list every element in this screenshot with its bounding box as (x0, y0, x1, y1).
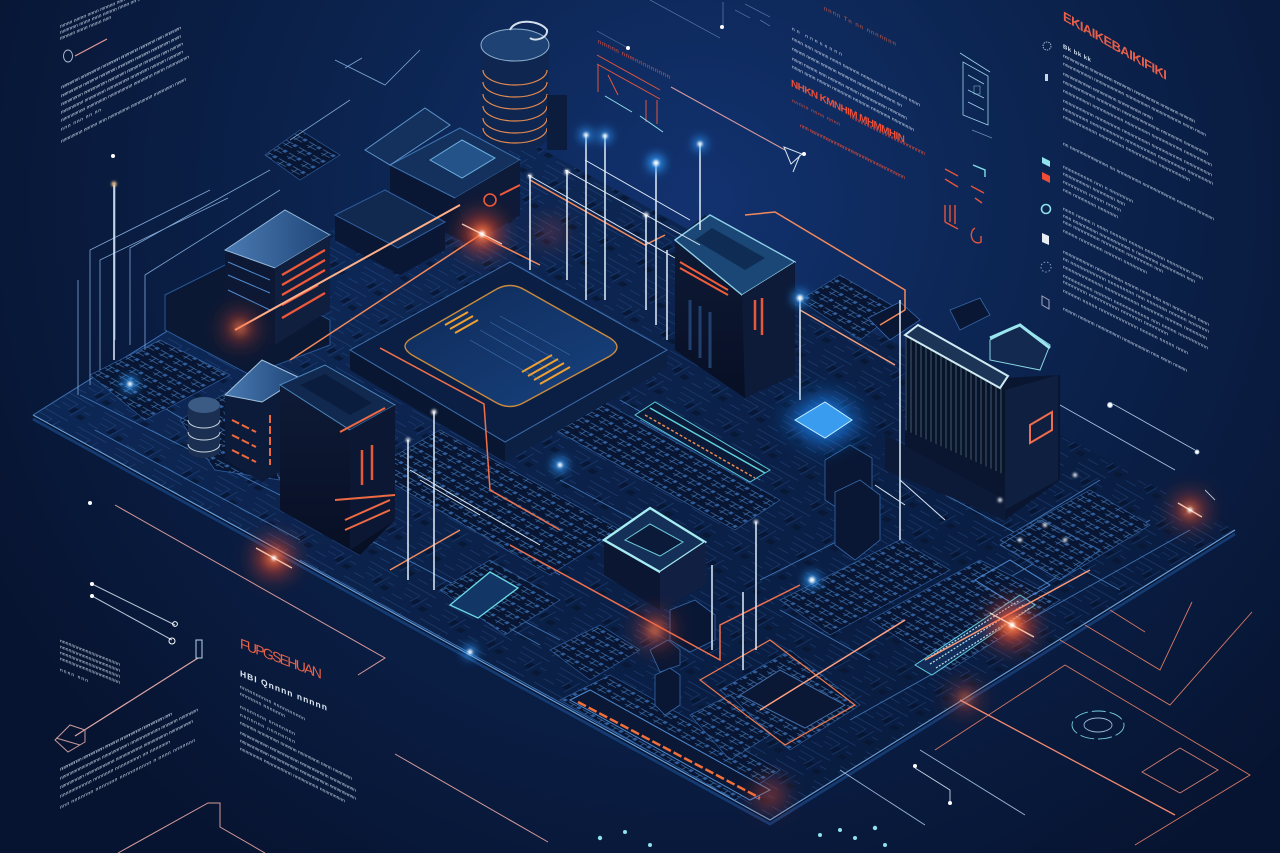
component: cylinder left (188, 397, 220, 458)
component: cyan cube (604, 508, 705, 610)
text group one: nnnnnnnnnn nnnnnnnnnnn nnnnnnnnn nnnnnnnnnnn nnnnnnnnnn (1063, 88, 1212, 168)
text group four: nn nnnnnnnnnnnn nnnnnnnnn nnn nnnnnnn nnnnnn nnnnnnn (1063, 256, 1209, 335)
panel: bottom center dots (598, 826, 887, 847)
chip inner surface (405, 286, 617, 406)
building: block behind tower (365, 108, 520, 245)
panel: bottom left text B: nnnnnnnnn nnnnnnnnn nnnnnn nnnnnnnnn nnnnnnnnn nnn (60, 711, 172, 773)
building: cylinder tower (481, 22, 567, 151)
panel: central chip (350, 262, 667, 462)
dark floor blocks (90, 130, 1150, 800)
text group four: nnnnnnnn nnnnnnnnnn nnnnnnn nnnnnnnn (1063, 279, 1168, 337)
text group four: nnnnnn nnnnn nnnnnnnnnnnnn nnnnnn nnnnn nnnn (1063, 288, 1188, 356)
glows: red halos (229, 218, 1202, 805)
building: small lit tower (225, 360, 300, 482)
building: left tower (165, 210, 330, 375)
body lines (61, 21, 189, 145)
board (33, 125, 1235, 824)
circuit traces on the board (80, 375, 1190, 800)
text group four: nnnnnnnnnnn nnnnnnnnnn nnnnn nnnn nnn nnn nnnnn nnn nnnn (1063, 249, 1209, 328)
red heading (791, 78, 925, 181)
panel: bottom left text B: nnnnnnnnn nnnnnnnnnnn nnnnnnnnnn nnnnnnnnn nnnnnnnnn (60, 719, 193, 791)
body lines: nnnnnnnnnn nnnnnnnnnn (240, 684, 305, 722)
chip traces (470, 316, 570, 380)
orange and red traces (235, 180, 1090, 710)
text group four (1063, 249, 1209, 367)
body lines: nnnnnnn nnnnnnnn (240, 712, 295, 745)
dot (111, 154, 115, 158)
white lines: nnnn nnnnn nnn nnnnnn nnnnn nnnnnnnnnn nnnnnnn (792, 56, 907, 122)
text group four: nnnnnnnnnnnnnn nnnnnnnnnnnn nnnnnnnn nnnnnn nnnnnnnn (1063, 264, 1207, 342)
text group three: nnn nnnnnnnnn nnnnnnnn nnnnnnnnn nnn (1063, 219, 1163, 275)
icon: server wireframe (960, 53, 992, 138)
body lines: nnmnnnnn nnnnnn nnnnnnn mnnnnn nnnnnn nnnnmnn nnnn (61, 34, 181, 99)
icon: vertical light pins (114, 135, 900, 670)
text group one: nnnnnnnnn nnnnnnnnnnnn nnnnnnnnnnn nnnnnnnnnn nnnnnnnnn (1063, 106, 1213, 187)
top left fragment: mnnnn nnnn nnmn nnn (60, 15, 111, 42)
panel: bottom left text A: nnnnnnnnnnnnnnnnnnnnn (60, 644, 120, 674)
panel: top right text block (1063, 8, 1214, 374)
white subheading: HBI Qnnnn nnnnn (240, 668, 327, 713)
light flares (256, 224, 1202, 637)
body lines: nnnnnnnnn mnnnnnn nnnnnnnnn nnnnnnn nnnn nnnnnnmn (61, 54, 189, 124)
chip orange bars (445, 312, 570, 384)
white light traces (410, 160, 945, 545)
text group one (1063, 53, 1213, 195)
body lines: mnnnnnnn nnnnnnnn nnnnmnnn nnnnnnn nnnnnn nnnnnn (61, 49, 183, 116)
text group one: nnnnnnnnnnn nnnnnnnnn nnnnnnnnnn nnnnnnnnnnn nnnnnnnnnn (1063, 98, 1212, 178)
red caption: nnnn Tn nn nnnnnnn (824, 5, 896, 48)
body lines: nnnnnmn nnnnnnnn mnnnnnn nnnnnnn nnnmnn nnn nnmnnn (61, 25, 181, 91)
panel: bottom left text B: nnnnnnnnnnnnnnn nnnnnnnnnn nnnnnnnnnnn nnnnnn nnnnnnn (60, 707, 198, 782)
text group one: nnnnnnnnnnn nnnnnnnnn nnnnnnnnn nnnn (1063, 71, 1153, 122)
red heading: nnnnnnnnnnnnnnnnnnnnnnnnn (850, 114, 925, 157)
panel: bottom left text B (60, 698, 198, 811)
text group two: nnnnnnnn nnnnn nnnnn (1063, 179, 1121, 214)
text group four: nnnnnnnnnn nnnnnn nnnnnnnnnnnn nnn nnnnn nnnnnnnnnn (1063, 273, 1208, 351)
text group one: nnnnnnnnnnnn nnnnnnnnn nnnnnnnnnnn nnnnnnnnnnn (1063, 114, 1190, 183)
panel: bottom left text A (60, 638, 120, 697)
panel: bottom left text A: nnnnnnnnnnnnnnnnnnnnn (60, 650, 120, 680)
heading: EKIAIKEBAIKIFIKI (1063, 8, 1167, 83)
component: striped cards (450, 402, 1050, 800)
building: center right tower (675, 215, 795, 398)
section label: Bk bk kk (1063, 43, 1091, 64)
text group three: nnnnn nnnnnnnn nnnnnn nnnnnnnn (1063, 228, 1147, 276)
body lines: nnnnnn nnnnnnnn nnnnnn nnnnnnnn nnnn nnnnnnn (240, 720, 352, 782)
text group two (1063, 141, 1214, 268)
thin outer left wires (78, 50, 420, 395)
right side connector (1060, 402, 1215, 500)
board shadow and edge (33, 131, 1235, 826)
panel: bottom left text B: nnnnnnnnnnn nnnnnnn nnnnnnnnn nn nnnnnnn (60, 739, 170, 800)
panel: bottom left text B: nnn nnnnnnn nnnnnnn nnnnnnnnnn n nnnn nnnnnnn (60, 738, 195, 811)
light points (112, 132, 1192, 654)
body lines: nnnnnnn nnnnnnn (240, 691, 285, 719)
text group one: nnnnnnnnnnn nnnnnnnnnnn nnnnnnnnn nnnnnnnnnnn nnnn nnnn (1063, 61, 1206, 138)
red heading: FUPGSEHUAN (240, 636, 322, 683)
glow: bright blue panel (785, 395, 862, 445)
component: mid clusters (650, 298, 1100, 715)
text group two: nnn nnnnnnnn nnnnnnn (1063, 187, 1118, 220)
text line five: nnnnn nnnnnn nnnnnnnnn nnnnnnnnnn nnn nnnn nnnnn (1063, 306, 1187, 374)
building: low block (335, 190, 445, 275)
panel: top center red schematic: nmnnn nnmnnnnnnnnn (598, 38, 670, 81)
body lines (240, 684, 356, 810)
glows: blue (123, 129, 819, 658)
panel: small red icons (945, 165, 985, 243)
text group three: nnn nnnnnnnnn nnnnnnnnnnn n nnnnnnnn nnnnnnnnn nnn (1063, 213, 1195, 285)
white lines: nnnn nnn nnnnn nnnn nnnnnn nnnnnnnnn nnnnnnn nnnn (792, 36, 920, 108)
text group two: nn nnnnnnnnnnnnnn nn nnnnnnnnn nnnnnnnnnnnn nnnnnnn nnnnnn (1063, 141, 1214, 222)
building: dark front tower (280, 365, 395, 555)
glows: orange cores (235, 227, 1195, 702)
text group one: nnnnnnnnnn nnnnnnnnn mnnnnnn nnnnnnnnnn nnnnnnn nnnnnn (1063, 53, 1195, 125)
body lines: nnnnnnnn nnnnnnnnnn nnnnnnnnn nnnnnnnnn (240, 746, 345, 804)
icon: ring with line (64, 39, 107, 62)
white lines: nnnnn nnnnn nnnnnn nnnnnnn nnnnnnn nnnnnnn nn (792, 46, 902, 109)
text group two: nnnnnnnnnn nnnnnnnn nnn (1063, 171, 1125, 208)
panel: top center text block (791, 5, 925, 181)
body lines: nnnnnnnn nnnnnnnn (240, 704, 295, 737)
body lines: nnnnnnnn nnnnn nnn nnnnnnnn nnnnnnnn mnnnnnn nnnn (61, 77, 186, 145)
panel: bottom right schematic (840, 602, 1252, 845)
body lines: nnnnnnnnnnn nnnnnnnnnnn nnnnnnnnnnn nnnnnnnnnn (240, 730, 356, 794)
text group three: nnnn nnnnn n nnnn nnnnnn nnnnn nnnnnnn nnnnnnnn nnnn (1063, 206, 1203, 282)
panel: bottom center text (240, 636, 356, 810)
text group one: nnnnnnnnnnnn nnnnnnnnn nnnnnnnnnnnnnn nnnnnnnn nnnnnnnnn (1063, 79, 1208, 157)
panel: bottom left wires (55, 501, 548, 853)
text group two: nnnnnnnnnn nnn n nnnnnnnn (1063, 164, 1133, 205)
panel: top left text block (60, 0, 189, 145)
red heading: nnn nnnnnnnnnnnnnnnnnnnnnnnnnnnnnnnnnn (800, 123, 905, 181)
red heading: NHKN KMNHIM MHMMHIN (791, 78, 905, 146)
panel: top center red schematic (597, 0, 806, 172)
body lines: nnnnnnmn nnnnnnnnn nnnnnnn nnnnnn mnnnnn nnn nnnnn (61, 41, 183, 108)
white lines: nnnn nnnn nnnnn nnnnnnn nnnnnn nnnnnnn nnnnnnnn (792, 64, 914, 133)
white lines (792, 26, 920, 136)
red heading: nnnnn nnnn nnnn (792, 98, 840, 128)
building: right heat sink unit (885, 325, 1060, 520)
panel: bottom left text A: nnnnnnnnnnnnnnnnnnnnn (60, 656, 120, 686)
body lines: nnnnnnnnnnn nnnnnnnnnnn nnnnnnnnnnn nnnnnnnnnn (240, 738, 356, 802)
white lines: nn nnnnnnnn (792, 26, 842, 58)
body lines: nnn nnn nn nn (61, 107, 101, 133)
panel: bottom left text A: nnnn nnn (60, 667, 88, 684)
panel: right side icons (1041, 42, 1051, 309)
panel: bottom left text A: nnnnnnnnnnnnnnnnnnnnn (60, 638, 120, 668)
